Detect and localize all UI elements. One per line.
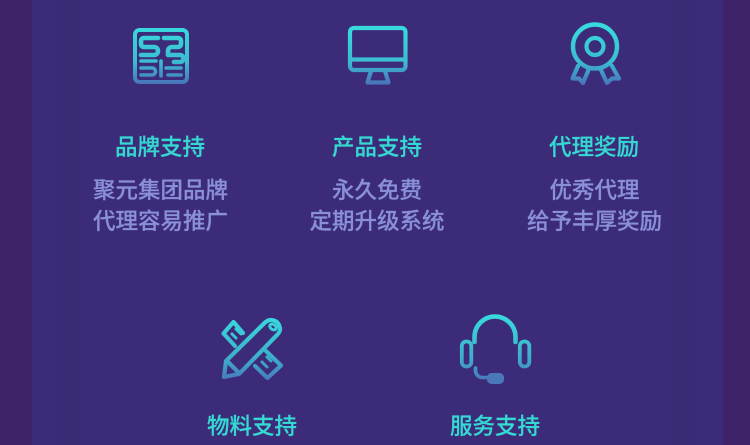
text: rewards description — [527, 178, 662, 234]
icon: award ribbon — [572, 24, 619, 83]
icon: ruler and pencil — [224, 320, 281, 378]
inner shaded band left — [56, 0, 86, 445]
text: rewards description: 给予丰厚奖励 — [527, 209, 662, 234]
text: brand description: 聚元集团品牌 — [93, 178, 228, 203]
text: product description: 定期升级系统 — [309, 209, 445, 234]
panel: service support — [450, 316, 540, 439]
text: product description — [309, 178, 445, 234]
panel: product support — [309, 28, 445, 234]
text: rewards description: 优秀代理 — [549, 178, 640, 203]
text: product description: 永久免费 — [332, 178, 422, 203]
heading: agent rewards: 代理奖励 — [549, 135, 639, 160]
text: brand description: 代理容易推广 — [93, 209, 228, 234]
right side strip — [723, 0, 750, 445]
text: brand description — [93, 178, 228, 234]
icon: brand seal — [135, 30, 187, 82]
heading: materials support: 物料支持 — [207, 414, 297, 439]
icon: headset — [462, 316, 529, 384]
panel: brand support — [93, 30, 228, 234]
panel: materials support — [207, 320, 297, 439]
panel: agent rewards — [527, 24, 662, 234]
heading: service support: 服务支持 — [450, 414, 540, 439]
inner shaded band right — [672, 0, 702, 445]
icon: monitor — [350, 28, 406, 82]
heading: product support: 产品支持 — [332, 135, 422, 160]
left side strip — [0, 0, 32, 445]
heading: brand support: 品牌支持 — [115, 135, 205, 160]
